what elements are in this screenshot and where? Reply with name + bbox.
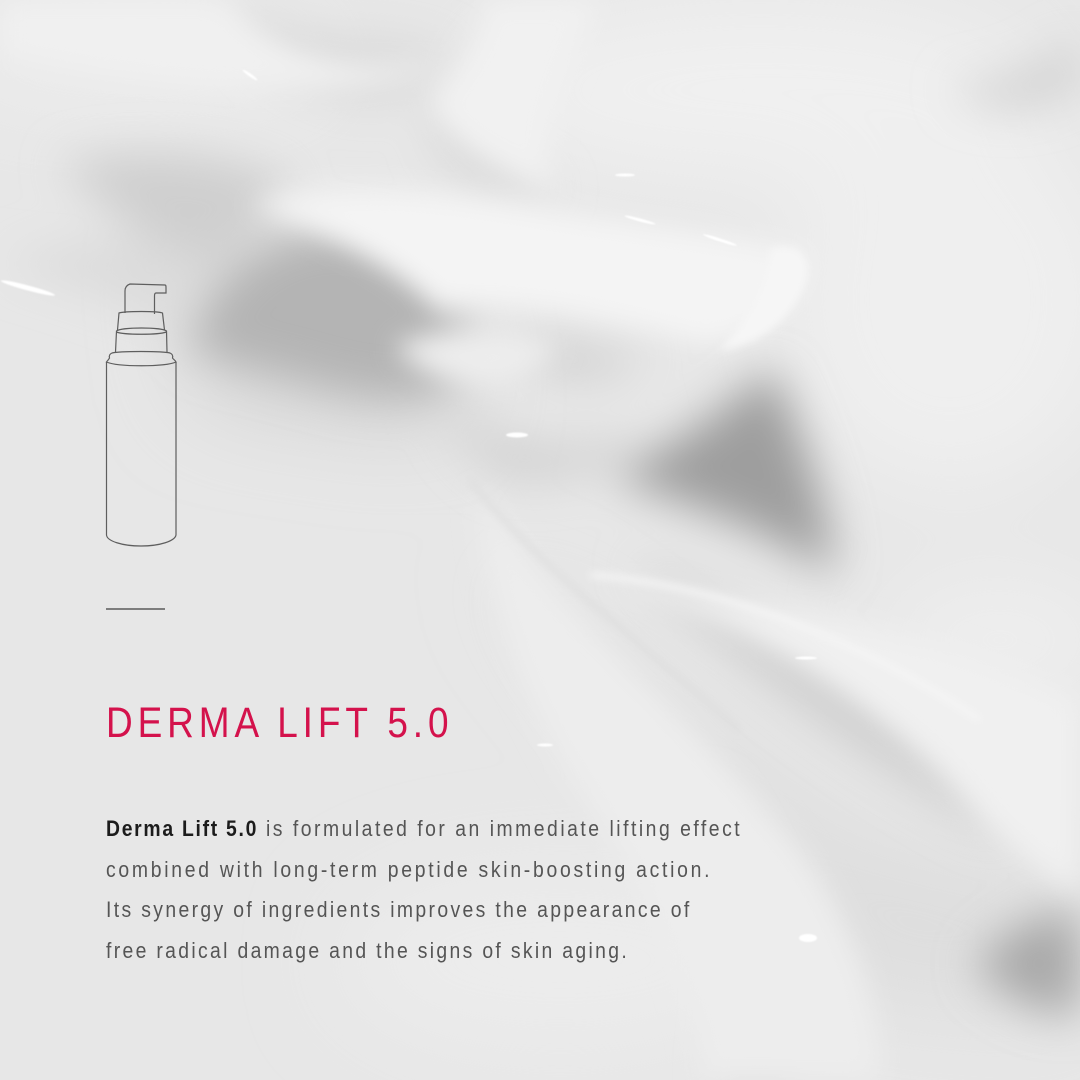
body text: Derma Lift 5.0 is formulated for an immediate lifting effect [106,816,742,841]
pump head [125,284,166,314]
body text: combined with long-term peptide skin-boosting action. [106,857,712,882]
body text: Its synergy of ingredients improves the appearance of [106,897,692,922]
icon: pump bottle [106,283,177,547]
body text [106,816,742,963]
pump neck [118,312,164,330]
title: DERMA LIFT 5.0 [106,699,453,747]
pump base [116,328,167,352]
bottle body [106,362,176,546]
divider rule [106,608,165,610]
body text: free radical damage and the signs of skin aging. [106,938,629,963]
collar [106,352,176,366]
